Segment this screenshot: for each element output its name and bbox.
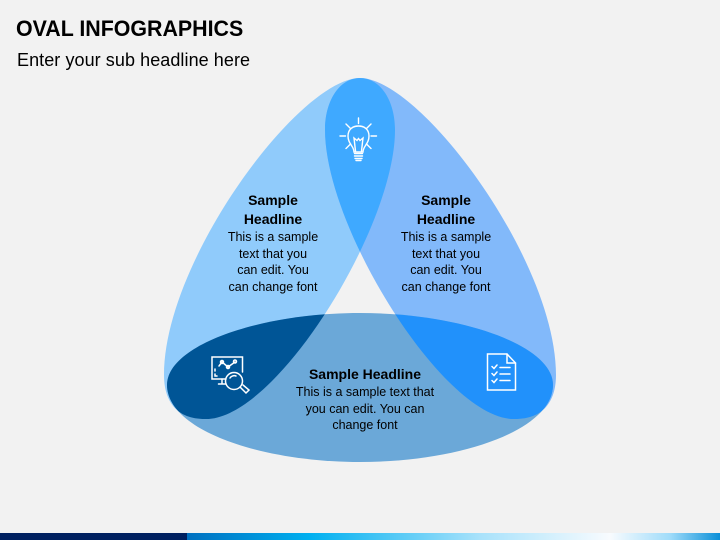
oval: left <box>164 78 395 419</box>
icon: light bulb <box>340 118 376 160</box>
text block: right: can edit. You <box>410 263 482 277</box>
text block: right: text that you <box>412 247 480 261</box>
icon: checklist document <box>488 354 516 390</box>
text block: bottom: change font <box>332 418 398 432</box>
overlap: bottom left <box>167 314 325 419</box>
subtitle: Enter your sub headline here <box>17 50 250 70</box>
text block: left <box>228 192 318 294</box>
oval: bottom <box>167 313 553 462</box>
text block: bottom: This is a sample text that <box>296 385 434 399</box>
text block: left: can change font <box>229 280 317 294</box>
text block: right: Headline <box>417 211 475 227</box>
title: OVAL INFOGRAPHICS <box>16 16 243 41</box>
overlap: top <box>325 78 395 252</box>
text block: bottom: you can edit. You can <box>306 402 424 416</box>
text block: left: can edit. You <box>237 263 309 277</box>
text block: right: This is a sample <box>401 230 491 244</box>
text block: left: Sample <box>248 192 298 208</box>
text block: bottom: Sample Headline <box>309 366 421 382</box>
text block: left: text that you <box>239 247 307 261</box>
overlap: bottom right <box>395 314 553 419</box>
text block: left: Headline <box>244 211 302 227</box>
oval diagram <box>164 78 556 462</box>
text block: left: This is a sample <box>228 230 318 244</box>
icon: chart and magnifier <box>212 357 249 393</box>
text block: right: Sample <box>421 192 471 208</box>
text block: bottom <box>296 366 434 432</box>
text block: right: can change font <box>402 280 490 294</box>
footer bar <box>0 533 720 540</box>
oval: right <box>325 78 556 419</box>
text block: right <box>401 192 491 294</box>
